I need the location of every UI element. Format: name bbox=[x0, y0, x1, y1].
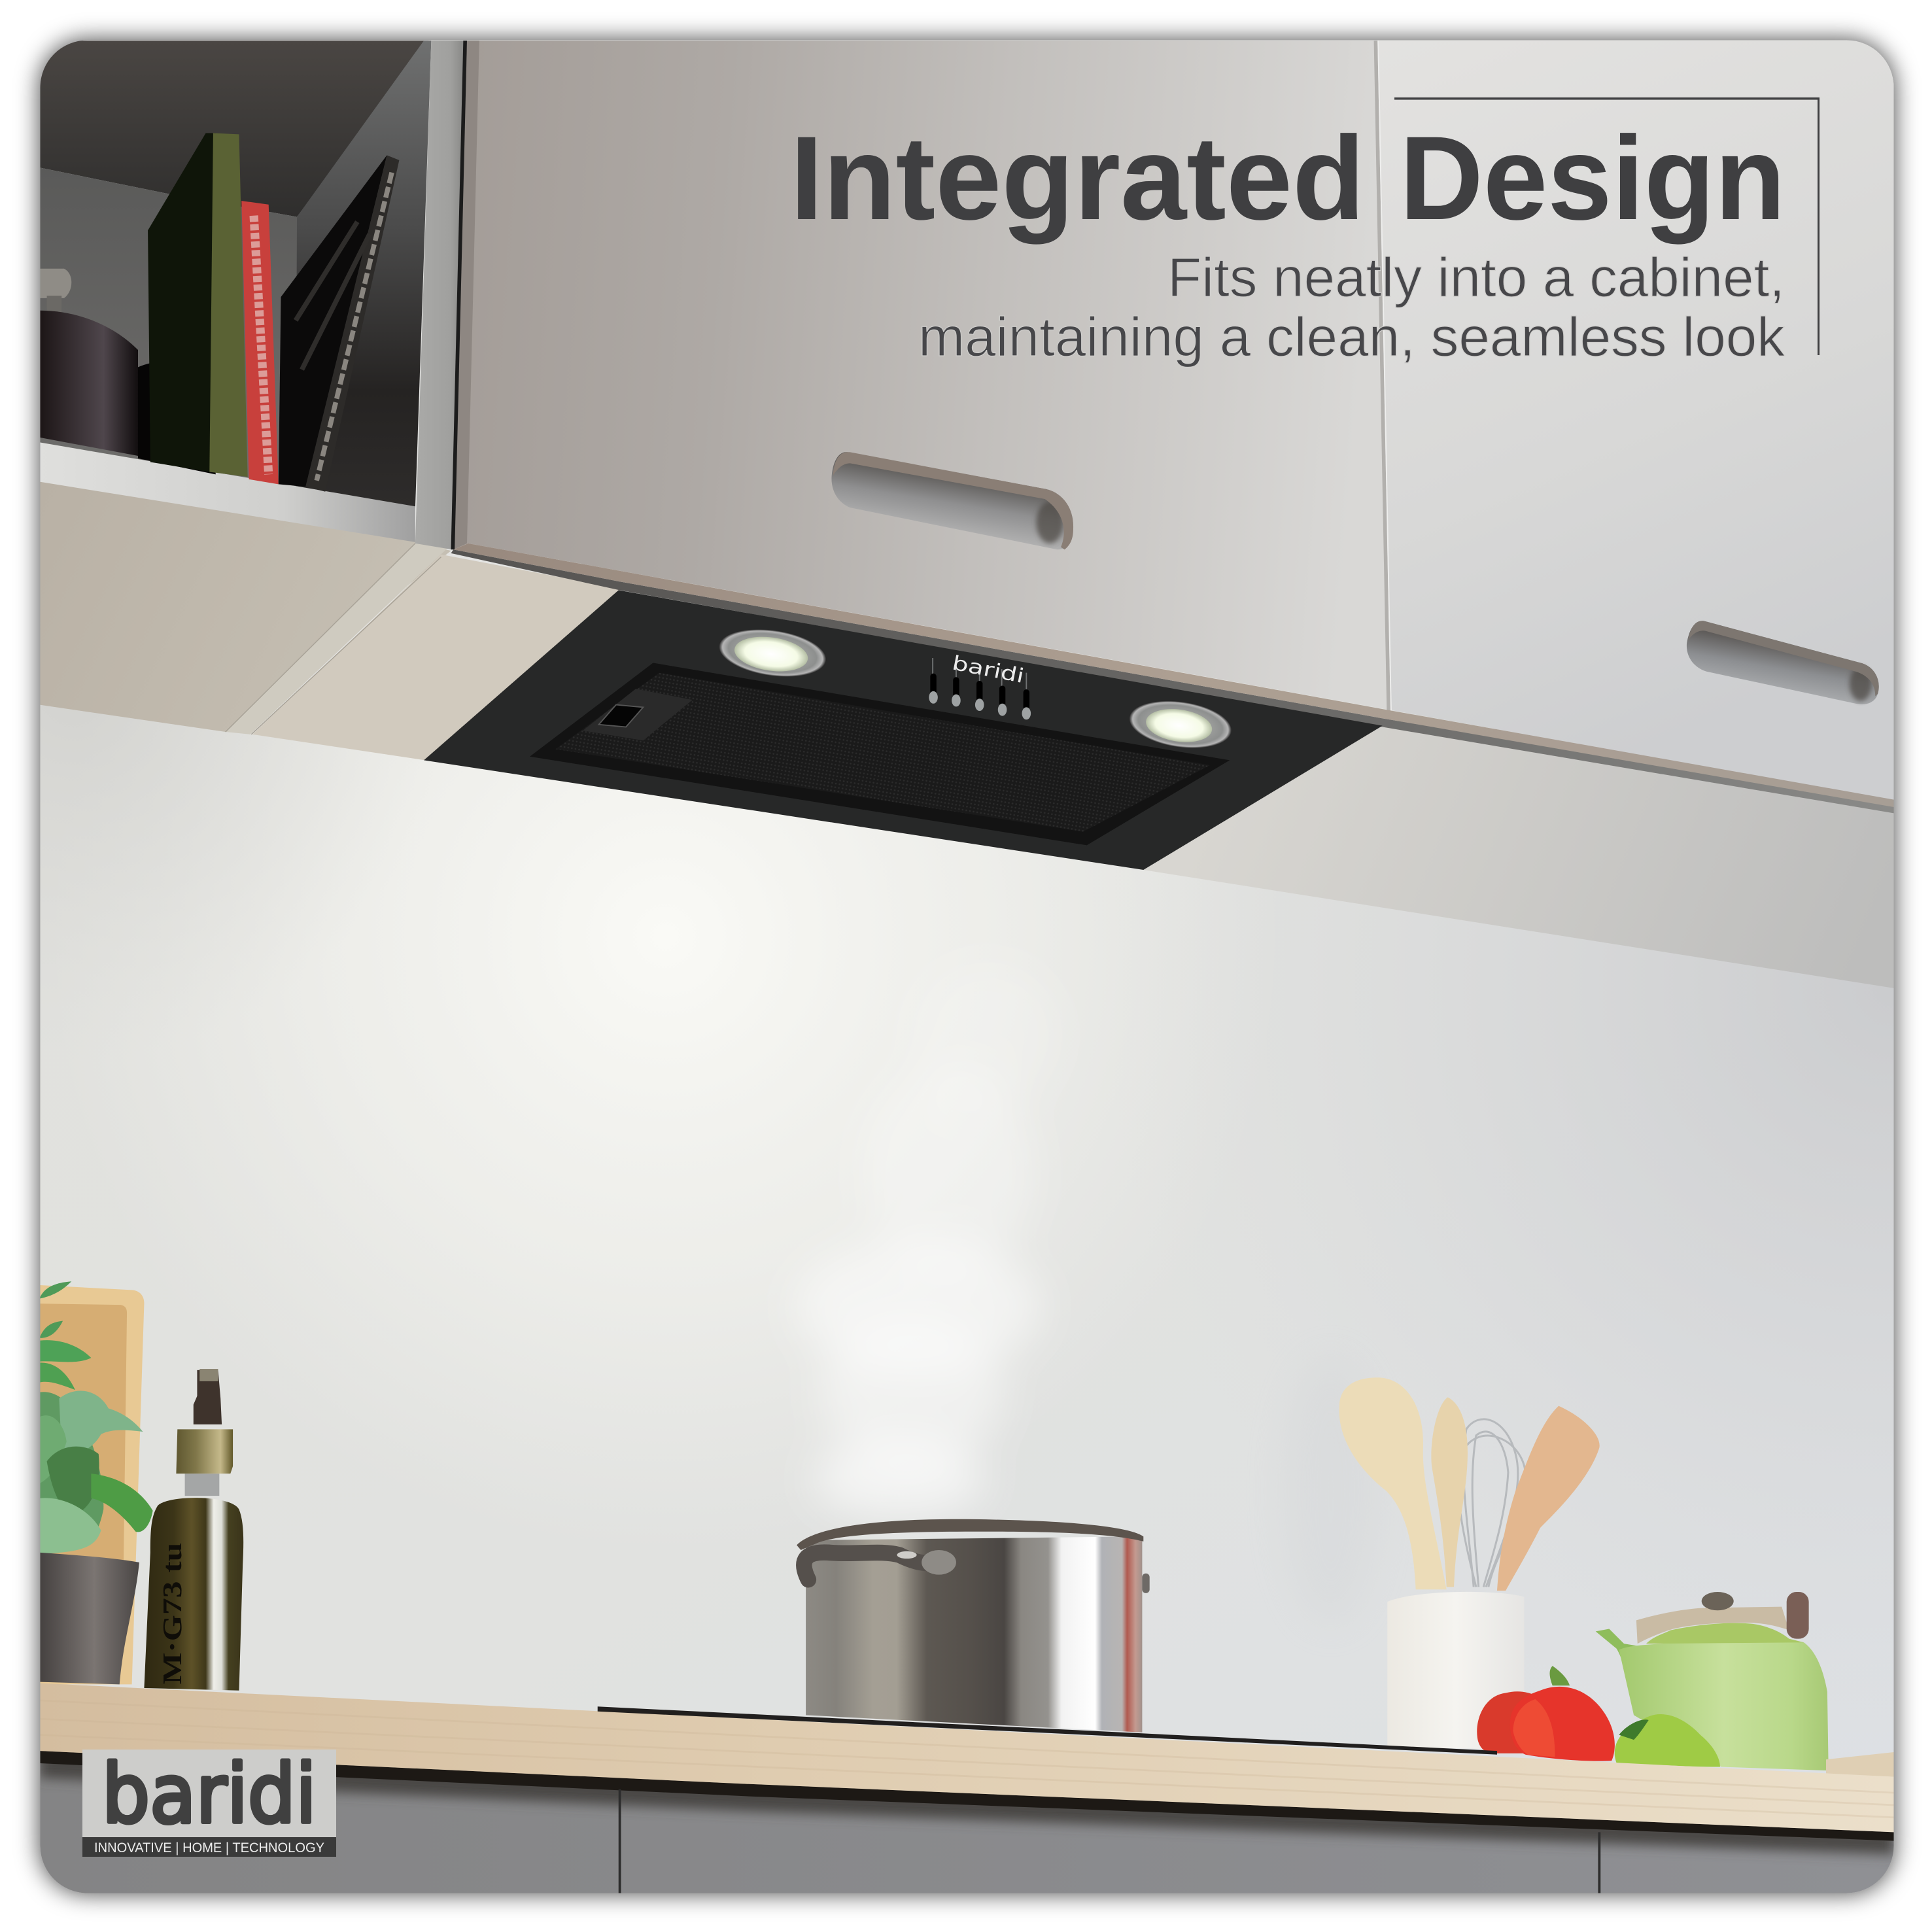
potted plant bbox=[39, 1281, 153, 1684]
door edge trim bbox=[451, 543, 1894, 813]
brand logo bbox=[82, 1748, 336, 1857]
leaves bbox=[39, 1281, 153, 1554]
right LED light bbox=[1126, 695, 1235, 754]
bracket frame around heading bbox=[1394, 97, 1820, 355]
mesh filter bbox=[556, 673, 1210, 832]
green pepper bbox=[1615, 1714, 1720, 1767]
subheading: maintaining a clean, seamless look bbox=[918, 306, 1785, 368]
hood brand text: baridi bbox=[950, 651, 1026, 688]
green teapot bbox=[1596, 1592, 1829, 1770]
door handle left bbox=[831, 452, 1073, 549]
wooden spoon bbox=[1339, 1377, 1447, 1589]
book: red bbox=[241, 201, 279, 484]
cabinet door left bbox=[453, 41, 1389, 710]
subheading bbox=[918, 247, 1785, 368]
second wooden spoon bbox=[1431, 1397, 1468, 1587]
base cabinets bbox=[39, 1744, 1894, 1897]
subheading: Fits neatly into a cabinet, bbox=[1167, 247, 1785, 308]
book: green bbox=[148, 133, 248, 477]
kitchen wall bbox=[41, 705, 1894, 1660]
heading: Design bbox=[1400, 111, 1785, 245]
utensil shadow on wall bbox=[1281, 1355, 1380, 1627]
left LED light bbox=[716, 623, 829, 683]
door handle right bbox=[1687, 621, 1879, 704]
cabinet door right bbox=[1377, 41, 1894, 801]
integrated hood bbox=[424, 590, 1383, 870]
spray bottle bbox=[144, 1369, 243, 1691]
book: black bbox=[279, 155, 399, 492]
spatula bbox=[1497, 1406, 1600, 1591]
filter tab bbox=[583, 689, 693, 740]
filter recess bbox=[530, 663, 1230, 845]
door bevel bbox=[453, 41, 479, 549]
pot handle bbox=[804, 1550, 956, 1579]
wooden countertop bbox=[39, 1683, 1894, 1832]
hood glass panel bbox=[424, 590, 1383, 870]
utensil holder bbox=[1387, 1592, 1524, 1750]
chopping board corner bbox=[1826, 1752, 1894, 1777]
stainless cooking pot bbox=[797, 1519, 1150, 1733]
steam rising from pot bbox=[809, 1218, 1032, 1519]
control buttons bbox=[929, 658, 1031, 719]
door gap lines bbox=[451, 41, 1391, 711]
red pepper bbox=[1477, 1666, 1615, 1761]
wooden tray bbox=[39, 1285, 144, 1684]
bottle label: M·G73 tu bbox=[157, 1543, 187, 1684]
heading: Integrated bbox=[790, 111, 1365, 245]
utensils bbox=[1339, 1377, 1600, 1750]
whisk bbox=[1458, 1419, 1525, 1587]
under-cabinet panels bbox=[39, 478, 1894, 988]
logo wordmark: baridi bbox=[102, 1748, 317, 1842]
plant pot bbox=[39, 1553, 139, 1684]
heading bbox=[790, 111, 1785, 245]
open shelf interior bbox=[39, 41, 466, 549]
jar and mug on shelf bbox=[39, 269, 216, 474]
induction cooktop edge bbox=[598, 1706, 1497, 1755]
logo tagline: INNOVATIVE | HOME | TECHNOLOGY bbox=[94, 1840, 324, 1855]
